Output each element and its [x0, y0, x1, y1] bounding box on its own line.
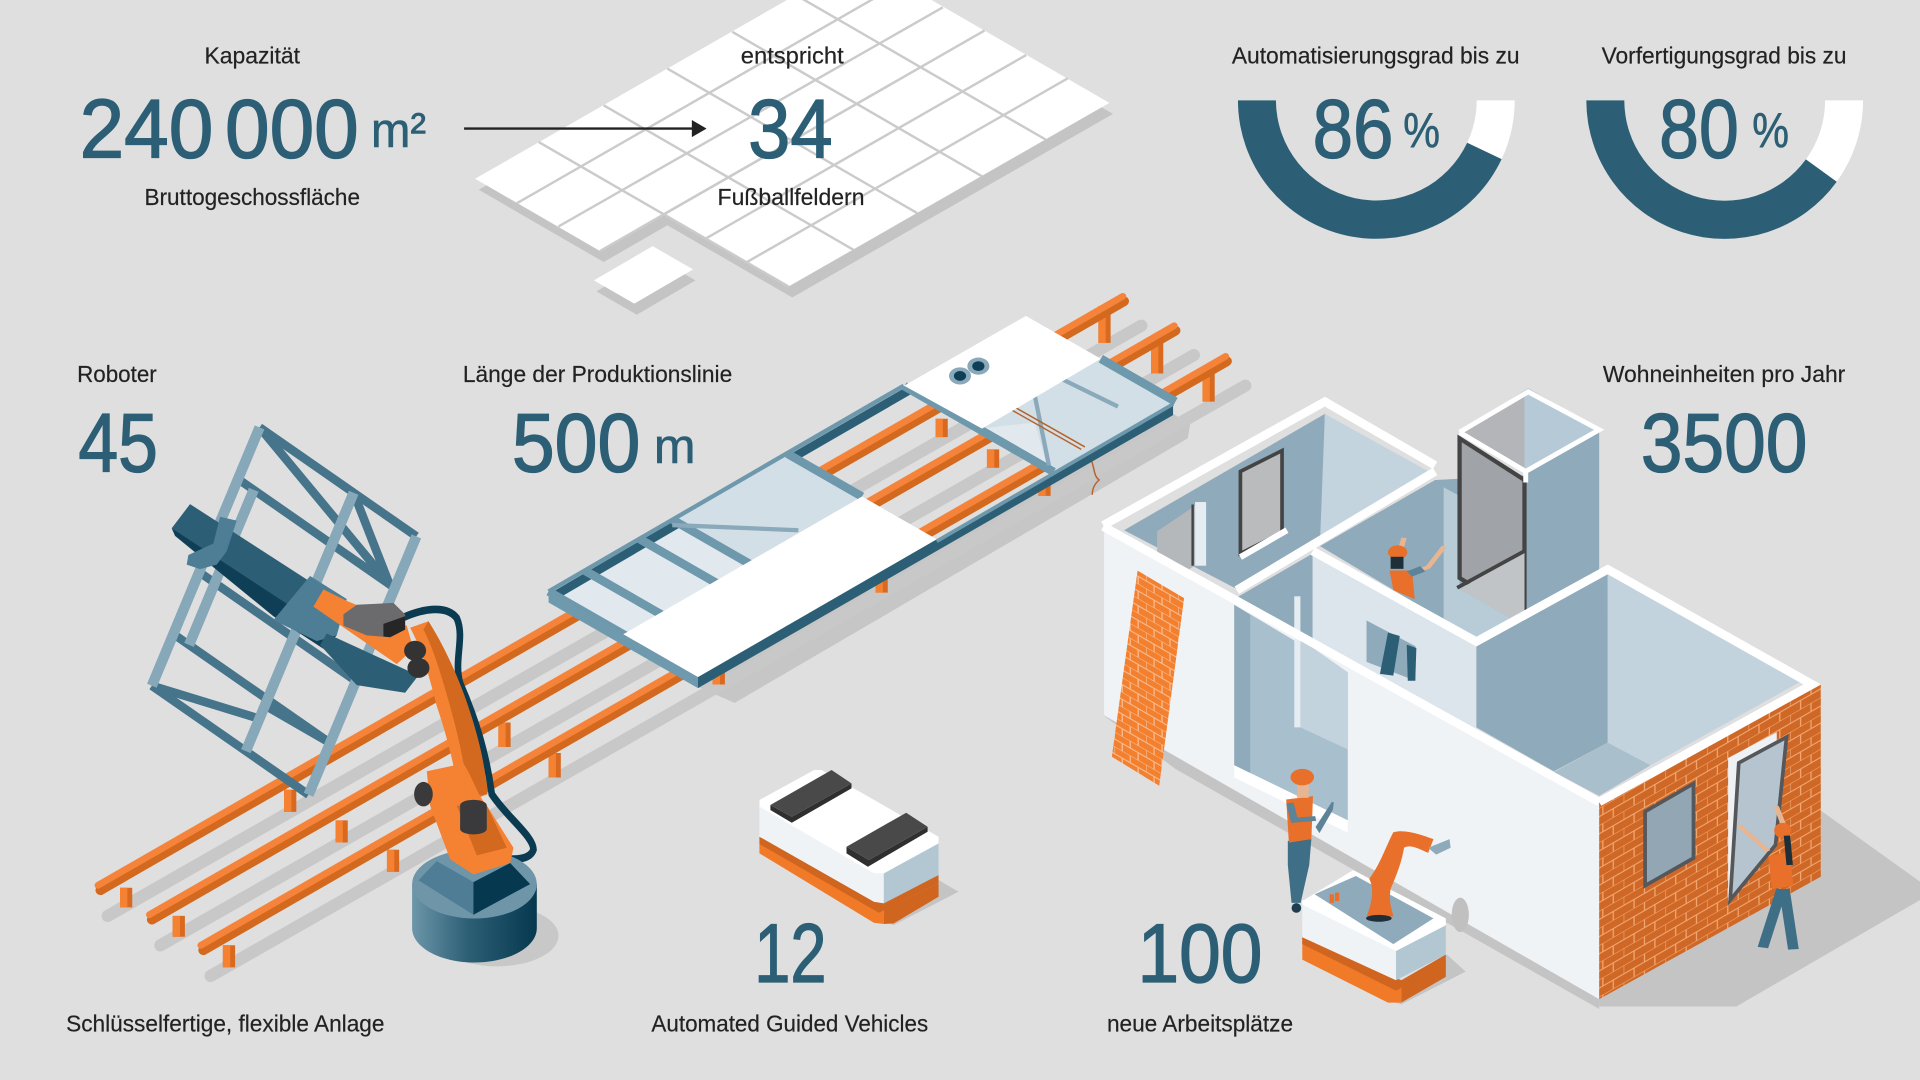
- wall panel on production line: [549, 316, 1176, 688]
- wrist motor: [343, 603, 429, 678]
- house module: [1103, 388, 1920, 1009]
- stat: capacity: [80, 43, 426, 210]
- stat: new jobs: neue Arbeitsplätze: [1107, 1011, 1293, 1037]
- orange chassis: [759, 837, 939, 924]
- stat: robots: [77, 361, 158, 489]
- assembly robot cell: [1302, 831, 1469, 1004]
- white cell body: [1302, 870, 1446, 980]
- stat: housing units: [1603, 361, 1846, 489]
- single football field: [594, 246, 696, 315]
- stat: AGVs: [651, 907, 928, 1037]
- stat: capacity: Bruttogeschossfläche: [144, 184, 360, 210]
- small robot arm: [1332, 831, 1451, 922]
- stat: new jobs: [1107, 907, 1293, 1037]
- chassis: [1302, 937, 1446, 1003]
- worker inside room: [1380, 538, 1444, 681]
- robot arm: [172, 504, 558, 966]
- black load pads: [770, 770, 928, 867]
- worker with tablet: [1286, 769, 1333, 913]
- stat: AGVs: 12: [754, 907, 827, 1000]
- wall frame held by robot: [152, 427, 416, 795]
- arrow: [464, 120, 707, 137]
- stat: football fields: Fußballfeldern: [718, 184, 864, 210]
- upper arm: [410, 621, 487, 806]
- base shadow: [435, 905, 558, 966]
- room 2: [1320, 475, 1531, 639]
- stat: football fields: 34: [748, 82, 833, 175]
- stat: automation gauge 86%: 86: [1313, 82, 1393, 175]
- panel edge: [549, 591, 698, 688]
- stat: production line length: [463, 361, 732, 489]
- stat: capacity: 240 000: [80, 82, 359, 175]
- stat: football fields: entspricht: [741, 43, 844, 69]
- stat: robots: Roboter: [77, 361, 157, 387]
- stat: production line length: 500: [512, 396, 640, 489]
- worker fitting window: [1739, 806, 1793, 949]
- cable: [403, 609, 533, 859]
- AGV vehicle: [759, 770, 958, 925]
- service sockets: [949, 358, 989, 384]
- panel timber frame: [549, 359, 1176, 677]
- room 1: [1124, 414, 1435, 590]
- stat: automation gauge 86%: Automatisierungsgrad bis zu: [1232, 43, 1520, 69]
- caption: turnkey plant: Schlüsselfertige, flexible Anlage: [66, 1011, 384, 1037]
- stat: prefabrication gauge 80%: Vorfertigungsgrad bis zu: [1602, 43, 1847, 69]
- stat: capacity: m²: [371, 104, 426, 158]
- forearm: [313, 589, 413, 664]
- stat: prefabrication gauge 80%: %: [1752, 104, 1789, 158]
- shaft glass door: [1457, 438, 1524, 618]
- white body: [759, 770, 939, 903]
- stat: AGVs: Automated Guided Vehicles: [651, 1011, 928, 1037]
- stat: prefabrication gauge 80%: [1586, 43, 1863, 239]
- stat: capacity: Kapazität: [204, 43, 301, 69]
- wall tops: [1103, 402, 1812, 802]
- front wall: [1104, 524, 1599, 999]
- stat: robots: 45: [78, 396, 158, 489]
- clamp beam: [172, 504, 418, 693]
- stat: production line length: m: [654, 420, 696, 474]
- room 4: [1476, 572, 1800, 796]
- production rails: [98, 296, 1245, 976]
- shaft: [1460, 388, 1599, 618]
- stat: production line length: Länge der Produktionslinie: [463, 361, 732, 387]
- room 3: [1237, 553, 1476, 733]
- stat: new jobs: 100: [1138, 907, 1262, 1000]
- stat: housing units: 3500: [1641, 396, 1807, 489]
- stat: automation gauge 86%: [1232, 43, 1520, 239]
- stat: automation gauge 86%: %: [1403, 104, 1440, 158]
- white cladding panels: [623, 497, 937, 677]
- panel infill: [549, 520, 822, 677]
- football fields grid: [475, 0, 1113, 315]
- shoulder: [414, 764, 513, 875]
- brick wall: [1599, 684, 1821, 999]
- stat: prefabrication gauge 80%: 80: [1659, 82, 1739, 175]
- stat: housing units: Wohneinheiten pro Jahr: [1603, 361, 1846, 387]
- base cylinder: [412, 850, 537, 963]
- stat: football fields: [718, 43, 864, 210]
- loose brick panel: [1112, 571, 1184, 786]
- legs seen through door: [1380, 633, 1416, 681]
- ground shadow: [1599, 811, 1920, 1007]
